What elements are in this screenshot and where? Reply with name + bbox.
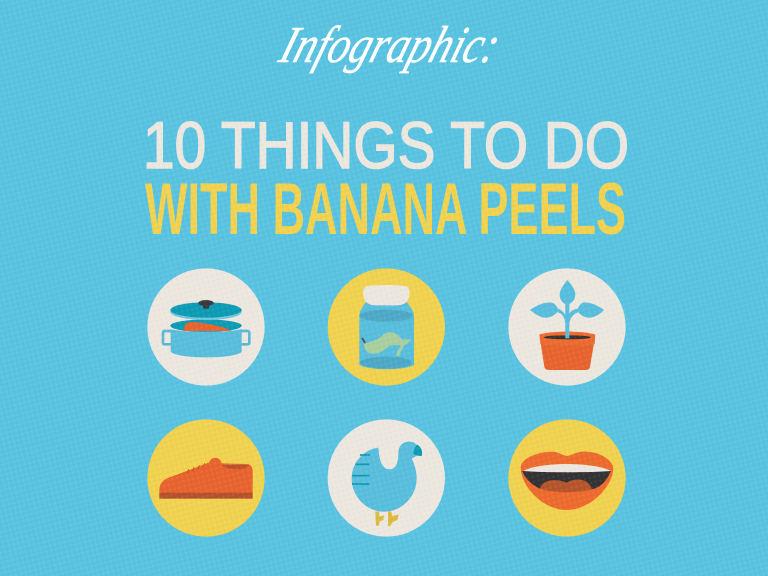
shoe sole bbox=[159, 493, 253, 499]
bird feet bbox=[375, 511, 399, 526]
banana peel in jar bbox=[361, 332, 412, 357]
banana peel in pot bbox=[183, 322, 232, 331]
teeth bbox=[523, 464, 611, 472]
bird body bbox=[352, 442, 419, 512]
shoe opening shadow bbox=[222, 465, 249, 469]
icon: mouth bbox=[508, 419, 626, 537]
jar shadows bbox=[359, 310, 413, 322]
mouth interior bbox=[522, 471, 611, 489]
icon: bird bbox=[328, 419, 445, 537]
plant pot body bbox=[541, 343, 594, 370]
icon: pot with banana peel bbox=[147, 268, 265, 386]
icon: jar with banana peel bbox=[328, 268, 445, 386]
jar lid bbox=[363, 285, 409, 305]
icon: plant in pot bbox=[508, 268, 626, 386]
lips bbox=[521, 452, 613, 510]
bird wing stripes bbox=[352, 455, 370, 484]
title line: 10 things to do: 10 THINGS TO DO bbox=[143, 108, 629, 182]
script heading: Infographic: Infographic: bbox=[272, 15, 508, 74]
tongue bbox=[540, 479, 592, 492]
pot opening bbox=[170, 319, 242, 332]
pot lid bbox=[170, 300, 242, 320]
pot body bbox=[171, 329, 242, 357]
soil bbox=[544, 335, 591, 339]
shoe upper bbox=[159, 458, 253, 493]
bird beak bbox=[413, 445, 422, 456]
plant bbox=[530, 280, 604, 338]
shoe laces bbox=[187, 463, 205, 473]
pot handles bbox=[163, 331, 249, 344]
plant pot rim bbox=[539, 332, 595, 345]
jar body bbox=[359, 302, 414, 369]
icon: shoe bbox=[147, 419, 265, 537]
